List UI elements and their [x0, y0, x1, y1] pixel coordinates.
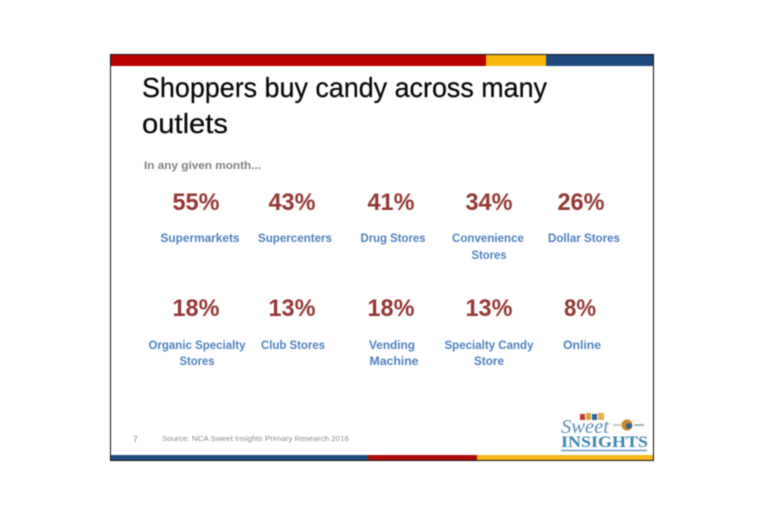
stat: Vending Machine 18%: 18% [368, 295, 414, 322]
logo word: Insights: INSIGHTS [561, 434, 648, 451]
icon: logo candy [613, 420, 644, 430]
stat: Dollar Stores 26%: Dollar Stores [548, 231, 620, 245]
stat: Specialty Candy Store 13%: Specialty Candy [444, 338, 534, 352]
title: outlets [142, 108, 228, 139]
title: Shoppers buy candy across many [142, 72, 547, 103]
stat: Organic Specialty Stores 18% [148, 295, 246, 368]
stat: Online 8%: 8% [564, 295, 596, 322]
stat: Convenience Stores 34%: Convenience [452, 231, 524, 245]
stat: Drug Stores 41%: Drug Stores [360, 231, 426, 245]
stat: Club Stores 13%: Club Stores [261, 338, 325, 352]
stat: Supercenters 43% [258, 189, 332, 245]
stat: Convenience Stores 34% [452, 189, 524, 262]
stat: Online 8%: Online [563, 338, 601, 352]
logo: Sweet Insights [561, 413, 648, 452]
logo underline [561, 450, 647, 452]
icon: logo flags [580, 413, 604, 420]
stat: Convenience Stores 34%: 34% [466, 189, 512, 216]
stat: Drug Stores 41%: 41% [368, 189, 414, 216]
stat: Club Stores 13% [261, 295, 325, 352]
logo word: Sweet: Sweet [561, 416, 609, 438]
bottom colour bar [111, 455, 653, 460]
stat: Supermarkets 55% [160, 189, 240, 245]
stat: Club Stores 13%: 13% [268, 295, 316, 322]
stat: Vending Machine 18%: Vending [369, 338, 415, 352]
stat: Organic Specialty Stores 18%: 18% [172, 295, 220, 322]
page number: 7 [133, 434, 138, 444]
title [142, 72, 547, 139]
stat: Convenience Stores 34%: Stores [472, 248, 507, 262]
stat: Specialty Candy Store 13%: 13% [466, 295, 512, 322]
source note: Source: NCA Sweet Insights Primary Research 2016 [162, 434, 349, 443]
stat: Specialty Candy Store 13%: Store [474, 354, 504, 368]
stat: Supercenters 43%: 43% [268, 189, 316, 216]
stat: Specialty Candy Store 13% [444, 295, 534, 368]
stat: Drug Stores 41% [360, 189, 426, 245]
stat: Supermarkets 55%: 55% [172, 189, 220, 216]
stat: Organic Specialty Stores 18%: Stores [180, 354, 215, 368]
panel: slide frame [110, 54, 654, 460]
stat: Online 8% [563, 295, 601, 352]
stat: Supercenters 43%: Supercenters [258, 231, 332, 245]
subtitle: In any given month... [144, 160, 261, 172]
stat: Vending Machine 18% [368, 295, 419, 368]
stat: Vending Machine 18%: Machine [370, 354, 419, 368]
stat: Supermarkets 55%: Supermarkets [160, 231, 240, 245]
top colour bar [111, 55, 653, 66]
stat: Dollar Stores 26%: 26% [558, 189, 604, 216]
stat: Dollar Stores 26% [548, 189, 620, 245]
stat: Organic Specialty Stores 18%: Organic Specialty [148, 338, 246, 352]
